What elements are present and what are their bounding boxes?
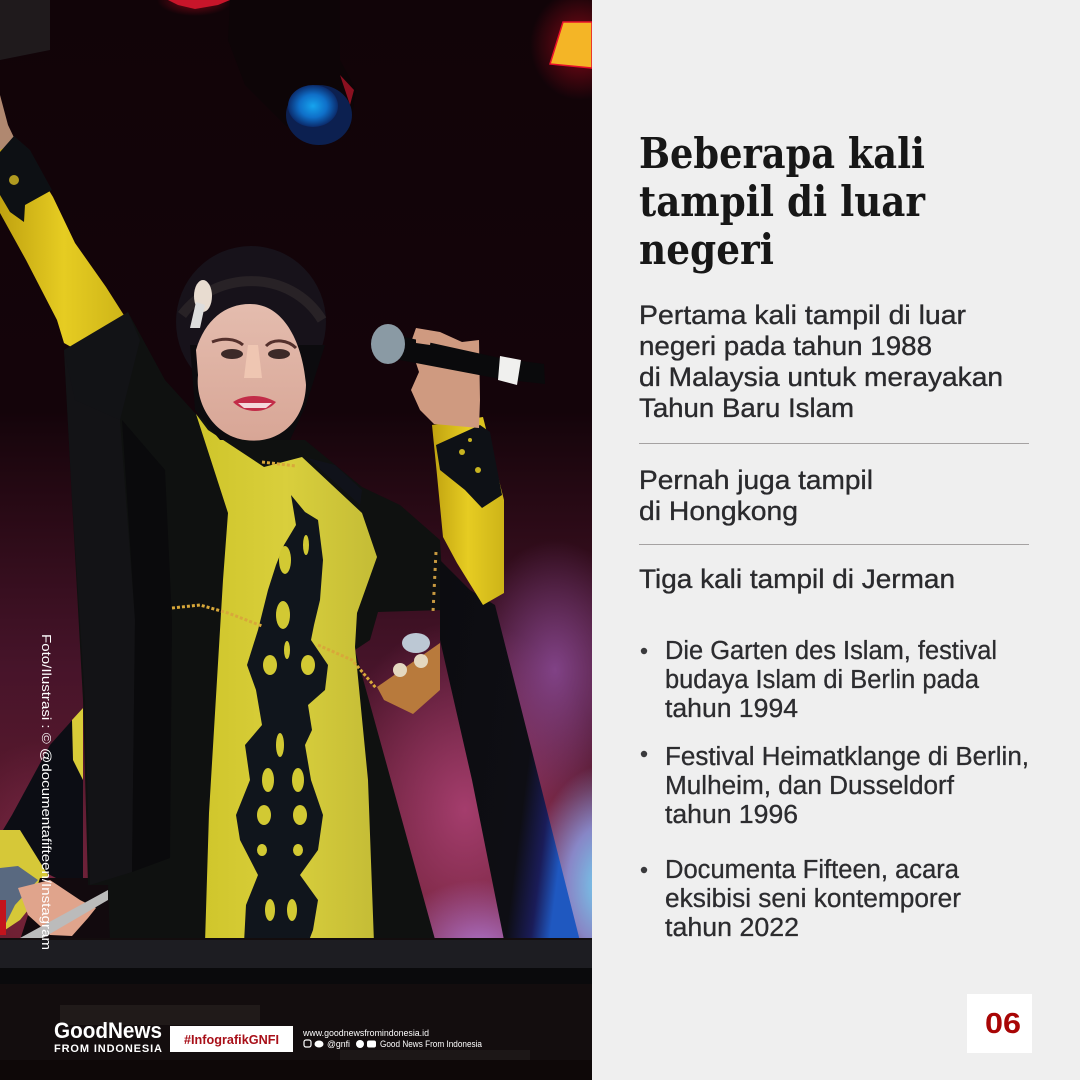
raised arm	[0, 95, 140, 420]
black lace embroidery	[236, 495, 328, 943]
bullet: Die Garten des Islam: tahun 1994	[665, 695, 798, 723]
icon: yellow stage light	[550, 22, 592, 68]
title: negeri	[639, 225, 774, 274]
bullet: Die Garten des Islam	[641, 637, 997, 723]
bullet: Die Garten des Islam: Die Garten des Islam, festival	[665, 637, 997, 665]
title: Beberapa kali	[639, 129, 925, 178]
panel: photo of singer on stage	[0, 0, 680, 1080]
title: tampil di luar	[639, 177, 926, 226]
lace collar	[308, 458, 362, 505]
long right drape	[440, 560, 581, 945]
footer: website and social: @gnfi	[327, 1039, 350, 1049]
footer: logo	[54, 1018, 162, 1055]
right sleeve and lace cuff	[432, 417, 504, 612]
text block: Jerman: Tiga kali tampil di Jerman	[639, 564, 955, 594]
guitar headstock	[377, 633, 440, 714]
title	[639, 129, 926, 274]
bullet: Documenta Fifteen	[641, 856, 962, 942]
gold beaded belt	[172, 605, 376, 688]
panel: text background	[592, 0, 1080, 1080]
footer: logo: FROM INDONESIA	[54, 1043, 162, 1055]
page number: 06	[985, 1008, 1021, 1040]
page number	[967, 994, 1032, 1053]
text block: Malaysia	[639, 300, 1003, 423]
bullet: Festival Heimatklange	[641, 743, 1029, 829]
icon: youtube	[367, 1040, 376, 1048]
hand holding microphone	[410, 328, 480, 428]
bullet: Documenta Fifteen: eksibisi seni kontemporer	[665, 885, 962, 913]
icon: instagram	[304, 1040, 311, 1047]
footer: website and social: Good News From Indonesia	[380, 1039, 482, 1049]
bullet: Documenta Fifteen: tahun 2022	[665, 914, 799, 942]
icon: facebook	[356, 1040, 364, 1048]
gold necklace	[262, 462, 296, 466]
text block: Hongkong	[639, 465, 873, 526]
microphone	[371, 324, 545, 385]
bullet: Festival Heimatklange: Festival Heimatklange di Berlin,	[665, 743, 1029, 771]
yellow centre panel	[196, 414, 377, 943]
text block: Malaysia: di Malaysia untuk merayakan	[639, 362, 1003, 392]
bullet: Festival Heimatklange: Mulheim, dan Dusseldorf	[665, 772, 955, 800]
photo credit: Foto/Ilustrasi : © @documentafifteen/Instagram	[39, 634, 54, 950]
footer: website and social	[302, 1028, 482, 1049]
icon: twitter	[314, 1040, 324, 1048]
text block: Malaysia: Tahun Baru Islam	[639, 393, 854, 423]
footer: logo: GoodNews	[54, 1018, 162, 1043]
footer: hashtag tag: #InfografikGNFI	[184, 1033, 279, 1047]
bullet: Die Garten des Islam: budaya Islam di Berlin pada	[665, 666, 980, 694]
text block: Hongkong: Pernah juga tampil	[639, 465, 873, 495]
icon: blue stage spotlight	[228, 0, 356, 146]
icon: red stage light	[168, 0, 230, 9]
stage front edge	[0, 938, 592, 1080]
footer: hashtag tag	[170, 1026, 293, 1052]
black robe and skirt	[64, 312, 444, 943]
bullet: Documenta Fifteen: Documenta Fifteen, acara	[665, 856, 960, 884]
dark lighting rig housing	[0, 0, 50, 60]
left musician	[0, 708, 112, 942]
text block: Malaysia: negeri pada tahun 1988	[639, 331, 932, 361]
text block: Hongkong: di Hongkong	[639, 496, 798, 526]
footer: website and social: www.goodnewsfromindonesia.id	[302, 1028, 429, 1038]
bullet: Festival Heimatklange: tahun 1996	[665, 801, 798, 829]
singer head: turban and face	[176, 246, 326, 441]
stage smoke lights	[0, 0, 680, 1020]
text block: Malaysia: Pertama kali tampil di luar	[639, 300, 966, 330]
